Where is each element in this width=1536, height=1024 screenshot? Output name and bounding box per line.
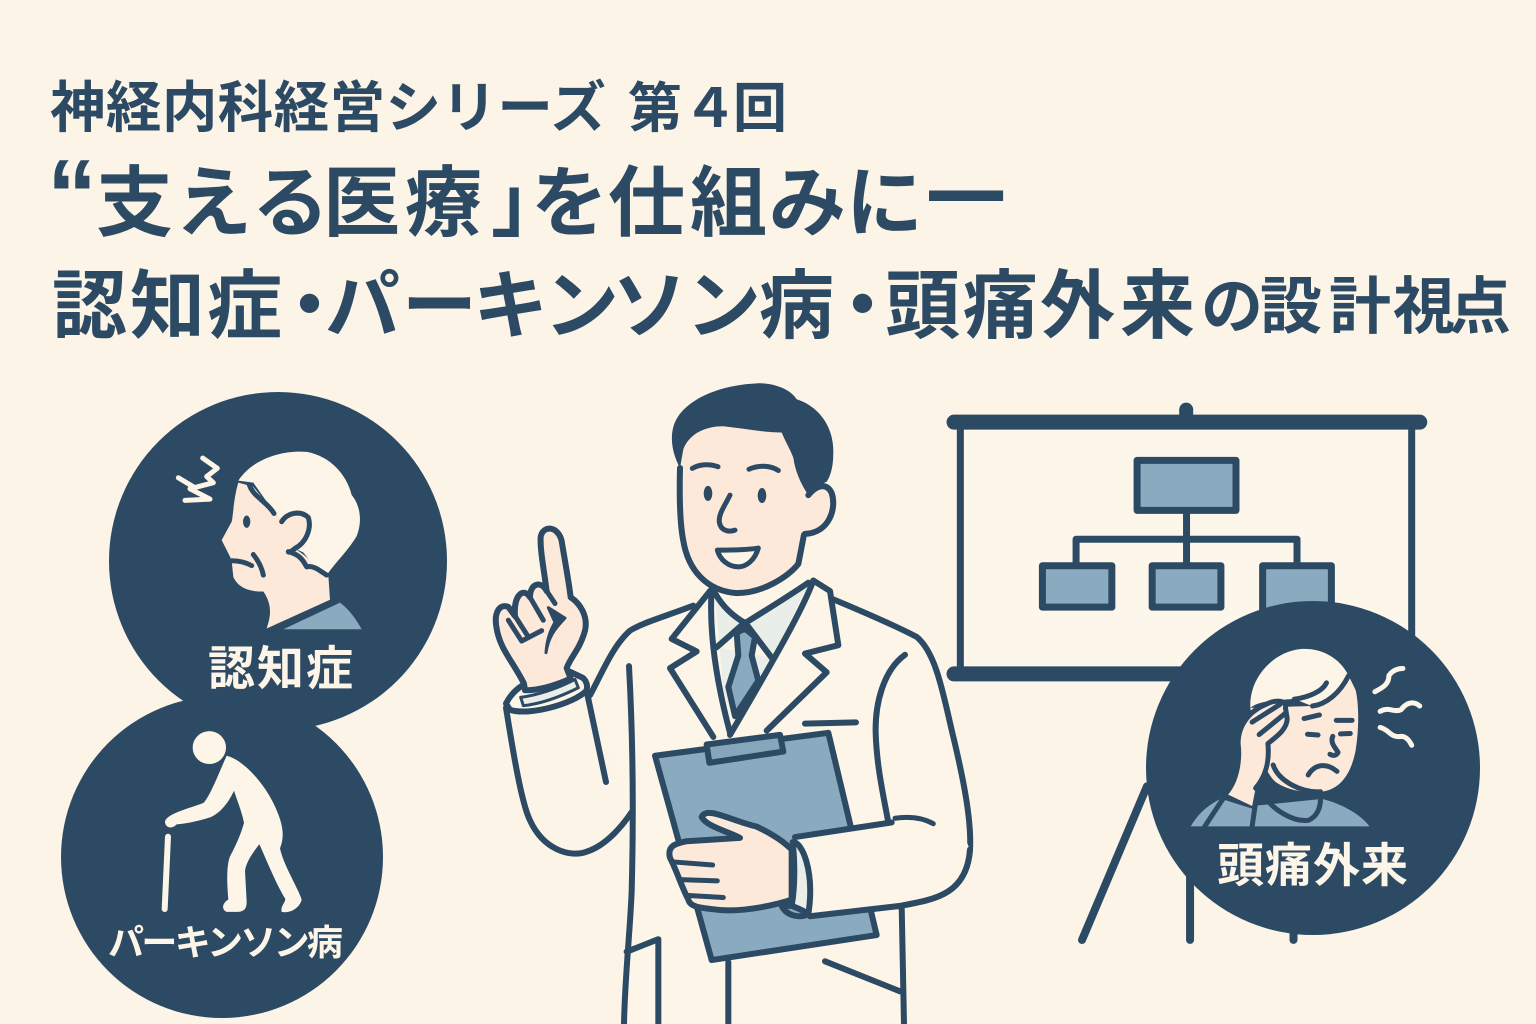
- raised hand: [1226, 701, 1287, 806]
- hair: [672, 383, 833, 495]
- main title line 2 suffix: の設計視点: [1201, 273, 1511, 342]
- head: [1250, 676, 1358, 792]
- org chart connectors: [1076, 511, 1297, 565]
- org chart top box: [1137, 460, 1236, 510]
- eyes: [704, 486, 766, 503]
- series heading: 神経内科経営シリーズ: [50, 77, 606, 139]
- holding hand: [669, 813, 792, 910]
- label: 認知症: [208, 642, 353, 695]
- main title line 2: 認知症・パーキンソン病・頭痛外来: [52, 264, 1195, 348]
- nose: [719, 495, 735, 531]
- shirt: [1191, 799, 1370, 826]
- hair: [1250, 649, 1349, 708]
- circle background: [61, 696, 383, 1018]
- face: [680, 426, 834, 593]
- tripod legs: [1082, 786, 1190, 940]
- circle background: [109, 392, 447, 730]
- raised sleeve: [506, 708, 632, 854]
- org chart box left: [1042, 566, 1112, 607]
- clipboard clip: [707, 735, 783, 763]
- title block: [47, 77, 1511, 348]
- main title dash: 一: [926, 155, 1006, 244]
- icon: dizziness zigzag: [178, 458, 217, 500]
- icon: stooped walker with cane: [165, 731, 302, 912]
- clipboard: [655, 733, 877, 960]
- label: 頭痛外来: [1217, 839, 1408, 892]
- label: パーキンソン病: [108, 922, 343, 963]
- circle: headache clinic: [1146, 601, 1480, 935]
- coat: [590, 581, 970, 1024]
- main title line 1: 支える医療」を仕組みに: [96, 161, 923, 247]
- shirt and collar: [715, 583, 808, 729]
- pain squiggles: [1375, 669, 1420, 745]
- org chart box centre: [1152, 566, 1221, 607]
- necktie: [728, 629, 758, 716]
- pointing hand: [496, 529, 586, 690]
- circle: dementia: [109, 392, 447, 730]
- icon: elderly profile: [178, 452, 362, 629]
- lapels: [711, 581, 813, 735]
- shirt cuff: [782, 906, 808, 916]
- eyebrows: [692, 465, 778, 470]
- main title opening quote: “: [47, 139, 97, 251]
- series number: 第４回: [628, 79, 787, 139]
- doctor figure: [496, 383, 970, 1024]
- circle background: [1146, 601, 1480, 935]
- icon: person with headache: [1191, 649, 1420, 826]
- presentation screen with org chart: [954, 410, 1420, 940]
- org chart box right: [1263, 566, 1331, 612]
- sleeve cuff: [506, 670, 587, 712]
- circle: parkinson: [61, 696, 383, 1018]
- smile: [717, 548, 758, 567]
- holding arm: [792, 812, 970, 916]
